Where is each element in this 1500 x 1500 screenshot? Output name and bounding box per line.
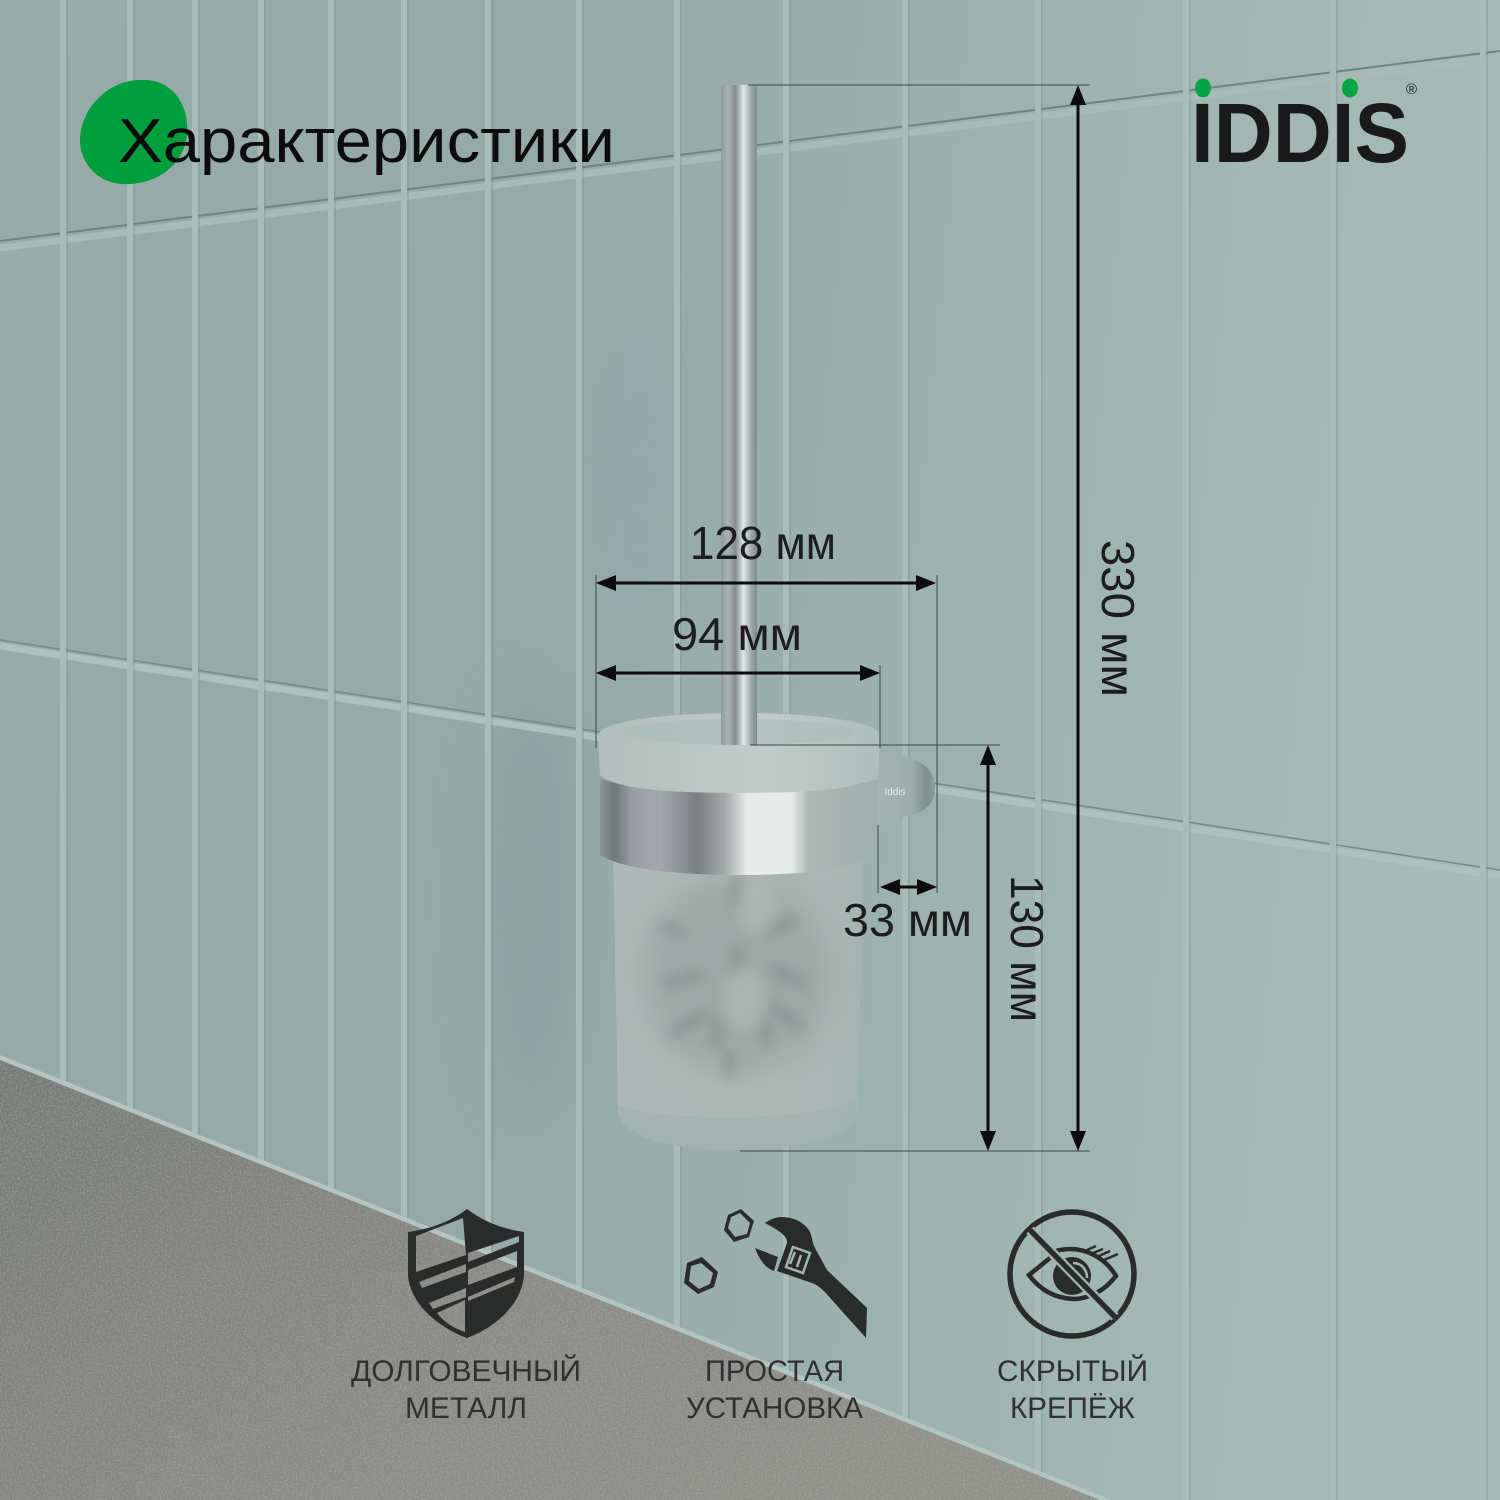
feature label: durable metal: ДОЛГОВЕЧНЫЙ [351,1354,581,1388]
logo: IDDIS: IDDIS [1191,86,1409,180]
feature label: easy installation: УСТАНОВКА [686,1392,863,1425]
wall bracket: Iddis [884,787,906,798]
panel: concrete floor [0,1050,1112,1500]
glass rim [598,700,880,795]
arrow: 330 mm [1070,85,1086,1151]
feature label: hidden fastening: КРЕПЁЖ [1010,1392,1135,1425]
icon: shield [408,1209,524,1338]
dimension lines [596,85,1090,1151]
arrow: 128 mm [596,575,936,591]
wall bracket [877,753,935,828]
metal band [600,778,878,875]
arrow: 94 mm [596,665,880,681]
icon: logo dots [1195,78,1358,98]
arrow: 130 mm [980,745,996,1151]
feature label: durable metal: МЕТАЛЛ [405,1392,527,1425]
feature label: hidden fastening: СКРЫТЫЙ [997,1354,1148,1388]
feature label: durable metal [351,1354,581,1425]
feature label: easy installation: ПРОСТАЯ [705,1355,844,1388]
icon: title green blob [80,80,187,184]
label: 33 mm: 33 мм [843,894,972,946]
title: Характеристики [118,107,615,176]
product: toilet brush holder [598,85,935,1150]
frosted glass cup [613,850,863,1150]
label: 130 mm: 130 мм [1001,875,1053,1022]
label: 330 mm: 330 мм [1092,540,1144,697]
arrow: 33 mm [880,879,937,895]
icon: hidden fastener eye [1010,1212,1134,1336]
label: 128 mm: 128 мм [690,517,836,569]
blurred brush bristles [643,875,827,1075]
icon: nuts and wrench [684,1209,867,1338]
feature label: easy installation [686,1355,863,1425]
label: 94 mm: 94 мм [672,608,802,660]
feature label: hidden fastening [997,1354,1148,1425]
brush handle rod [721,85,757,745]
logo: IDDIS: ® [1406,81,1417,98]
